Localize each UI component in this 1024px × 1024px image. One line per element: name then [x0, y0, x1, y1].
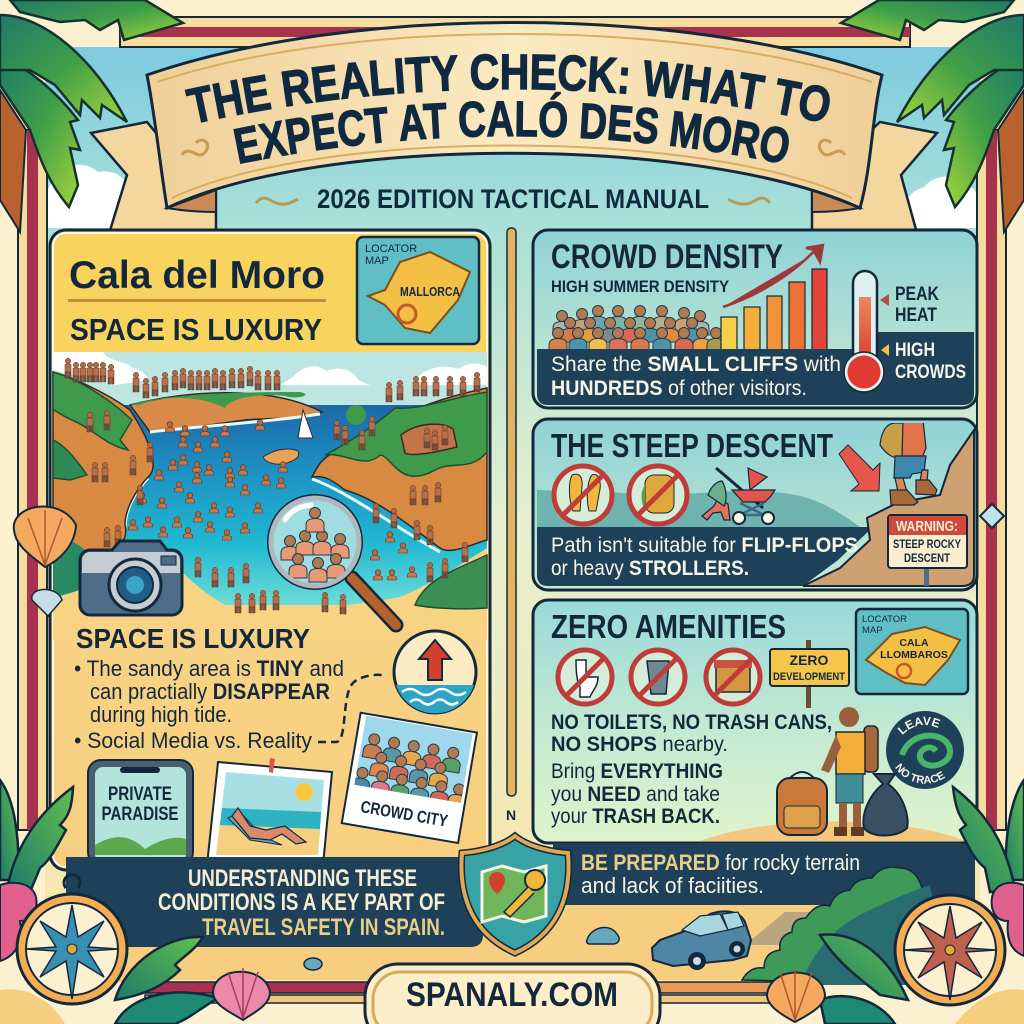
locator map: LOCATOR	[862, 614, 907, 625]
callout: understanding: UNDERSTANDING THESE	[188, 865, 417, 892]
caption: HUNDREDS of other visitors.	[551, 377, 807, 400]
thermometer	[844, 271, 884, 392]
photo: beach sunbather	[207, 758, 332, 865]
heading: ZERO AMENITIES	[551, 608, 786, 645]
ground strip with bars	[48, 905, 980, 1004]
label: peak heat: PEAK	[895, 284, 939, 305]
seashells bottom	[213, 968, 825, 1022]
locator map	[357, 237, 479, 344]
people on cliffs and shore	[65, 358, 480, 614]
callout: be prepared: BE PREPARED for rocky terrain	[581, 850, 860, 875]
palm leaves: top right	[841, 0, 1024, 232]
compass right	[895, 895, 1005, 1005]
callout: understanding: TRAVEL SAFETY IN SPAIN.	[202, 914, 445, 941]
leave no trace badge	[886, 711, 964, 789]
callout: be prepared: and lack of faciities.	[581, 873, 764, 898]
heading: Cala del Moro: Cala del Moro	[69, 254, 325, 297]
locator map: LOCATOR	[365, 243, 417, 255]
hiker	[880, 420, 937, 505]
pebbles	[6, 927, 1017, 1010]
leave no trace badge: NO TRACE	[895, 763, 946, 784]
text: bring everything	[551, 760, 723, 828]
photo: crowd city: CROWD CITY	[359, 797, 450, 831]
warning sign: STEEP ROCKY	[893, 537, 961, 551]
footer: spanaly.com pill: SPANALY.COM	[406, 976, 618, 1014]
palm leaves: top left	[0, 0, 183, 232]
magnifying glass	[268, 495, 396, 625]
text block: space is luxury: • The sandy area is TINY and	[74, 656, 344, 681]
sign: zero development: DEVELOPMENT	[773, 671, 845, 683]
leave no trace badge: LEAVE	[897, 716, 940, 735]
panel: Cala del Moro	[50, 230, 490, 870]
title text: THE REALITY CHECK: WHAT TO	[184, 54, 830, 123]
text block: space is luxury: during high tide.	[90, 702, 232, 727]
label: high crowds	[881, 340, 966, 383]
label: peak heat: HEAT	[895, 305, 937, 326]
no trash cans icon	[631, 650, 685, 704]
subheading: space is luxury: SPACE IS LUXURY	[70, 312, 322, 347]
warning sign: WARNING:	[896, 519, 958, 535]
caption band	[537, 332, 974, 405]
label: high crowds: CROWDS	[895, 362, 966, 383]
car	[652, 911, 751, 970]
text: bring everything: Bring EVERYTHING	[551, 760, 723, 783]
panel: crowd density	[533, 230, 977, 408]
text: no toilets: NO TOILETS, NO TRASH CANS,	[551, 711, 832, 734]
rocky cliff	[803, 430, 974, 586]
trend arrow	[723, 245, 823, 307]
footer: spanaly.com pill	[365, 964, 660, 1024]
bottom band right	[553, 843, 975, 905]
diamond ornament	[980, 504, 1004, 528]
text: bring everything: you NEED and take	[551, 783, 720, 806]
crowd	[549, 306, 725, 352]
camera icon	[80, 541, 182, 615]
title banner	[88, 21, 940, 228]
phone: private paradise: PRIVATE	[108, 784, 172, 805]
no flip-flops icon	[554, 466, 612, 524]
phone: private paradise	[88, 760, 193, 865]
title text: EXPECT AT CALÓ DES MORO	[233, 92, 789, 164]
caption band	[537, 527, 873, 586]
warning sign	[888, 515, 967, 586]
road	[745, 912, 822, 945]
locator map: MAP	[365, 255, 389, 267]
panel header	[54, 234, 486, 352]
bar chart	[721, 269, 827, 350]
callout: understanding: CONDITIONS IS A KEY PART OF	[158, 889, 445, 916]
callout: be prepared	[581, 850, 860, 898]
caption: Share the SMALL CLIFFS with	[551, 353, 841, 376]
sign: zero development	[770, 640, 849, 708]
phone: private paradise: PARADISE	[102, 804, 178, 825]
label: peak heat	[880, 284, 939, 326]
shield icon	[461, 836, 569, 953]
shell left	[14, 506, 76, 616]
tropical leaves bottom right	[820, 780, 1024, 1024]
text block: space is luxury: can practially DISAPPEAR	[90, 679, 330, 704]
divider with compass N: N	[506, 807, 516, 823]
no toilets icon	[558, 650, 612, 704]
text: no toilets: NO SHOPS nearby.	[551, 733, 728, 756]
caption	[551, 353, 841, 400]
compass left	[17, 875, 127, 1004]
no shops icon	[706, 650, 760, 704]
sign: zero development: ZERO	[790, 652, 829, 668]
subheading: HIGH SUMMER DENSITY	[551, 277, 730, 296]
text: bring everything: your TRASH BACK.	[551, 805, 720, 828]
panel: steep descent	[533, 419, 977, 590]
caption	[551, 534, 858, 580]
text block: space is luxury	[74, 623, 344, 753]
tropical leaves bottom left	[0, 780, 218, 1024]
arrow: social media to tide	[318, 675, 382, 742]
text block: space is luxury: SPACE IS LUXURY	[76, 623, 310, 654]
photo: crowd city	[342, 713, 478, 843]
caption: Path isn't suitable for FLIP-FLOPS	[551, 534, 858, 557]
locator map: MALLORCA	[400, 284, 460, 299]
locator map: MAP	[862, 625, 883, 636]
callout: understanding	[158, 865, 445, 941]
heading: crowd density: CROWD DENSITY	[551, 238, 783, 276]
title text	[184, 54, 830, 164]
divider with compass N	[506, 228, 516, 823]
swimmers	[128, 420, 416, 580]
heading: THE STEEP DESCENT	[551, 427, 833, 464]
person with stroller	[702, 468, 775, 524]
bottom band left	[66, 857, 483, 947]
hiker person	[821, 707, 878, 836]
locator map: LLOMBAROS	[880, 649, 948, 661]
trash bag	[863, 774, 908, 836]
label: high crowds: HIGH	[895, 340, 935, 361]
backpack	[777, 772, 827, 835]
no heavy backpack icon	[629, 466, 687, 524]
subtitle: 2026 EDITION TACTICAL MANUAL	[317, 184, 709, 214]
caption: or heavy STROLLERS.	[551, 557, 749, 580]
locator map	[856, 609, 968, 694]
beach illustration	[53, 352, 487, 640]
text: no toilets	[551, 711, 832, 756]
red arrow	[839, 445, 880, 491]
warning sign: DESCENT	[904, 551, 951, 565]
bush	[742, 867, 960, 985]
high tide icon	[394, 631, 476, 713]
text block: space is luxury: • Social Media vs. Reality	[74, 728, 312, 753]
sand mound	[700, 822, 966, 841]
panel: zero amenities	[532, 598, 978, 844]
locator map: CALA	[899, 637, 929, 649]
